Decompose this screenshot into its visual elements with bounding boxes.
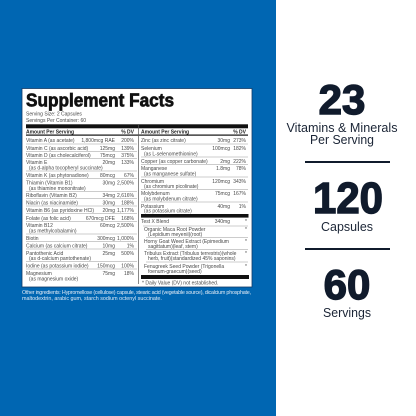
left column: vitamins: 75mcg [100, 153, 115, 159]
table headers: % DV [121, 130, 135, 136]
left column: vitamins: 20mg [102, 208, 115, 214]
left column: vitamins: 2,500% [117, 180, 135, 186]
other ingredients note: Other ingredients: Hypromellose (cellulose) capsule, stearic acid (vegetable source), dicalcium phosphate, [22, 290, 252, 296]
left column: vitamins: 25mg [102, 251, 115, 257]
left column: vitamins: 2,616% [117, 193, 135, 199]
right column: Test X blend: Tribulus Extract (Tribulus terrestris)(whole [144, 251, 237, 257]
right column: Test X blend: (Lepidium meyenii)(root) [148, 232, 203, 238]
right column: minerals: Selenium [141, 146, 162, 152]
left column: vitamins: (as d-alpha tocopheryl succinate) [29, 166, 103, 172]
left column: vitamins: 67% [124, 173, 135, 179]
stat: 60 servings: Servings [323, 306, 371, 320]
left column: vitamins: 30mg [102, 200, 115, 206]
panel: supplement facts label [22, 88, 252, 287]
left column: vitamins: 1,177% [117, 208, 135, 214]
right column: Test X blend: Fenugreek Seed Powder (Trigonella [144, 264, 224, 270]
left column: vitamins: Biotin [26, 236, 39, 242]
left column: vitamins: 20mg [102, 160, 115, 166]
left column: vitamins: 168% [121, 216, 135, 222]
heading: Supplement Facts: Supplement Facts [26, 90, 174, 110]
left column: vitamins: Thiamin (Vitamin B1) [26, 180, 73, 186]
right column: Test X blend: * [245, 227, 247, 233]
left column: vitamins: 60mcg [100, 223, 115, 229]
right column: minerals: 273% [233, 138, 247, 144]
left column: vitamins: Folate (as folic acid) [26, 216, 71, 222]
stat: 23 vitamins and minerals [286, 76, 398, 147]
stat: 23 vitamins and minerals: Vitamins & Minerals [286, 121, 398, 135]
right column: Test X blend: 340mg [215, 219, 230, 225]
left column: vitamins: Magnesium [26, 271, 52, 277]
left column: vitamins: 2,500% [117, 223, 135, 229]
left column: vitamins: 1,000% [117, 236, 135, 242]
right column: Test X blend: Organic Maca Root Powder [144, 227, 206, 233]
left column: vitamins: Vitamin B6 (as pyridoxine HCl) [26, 208, 94, 214]
right column: minerals: 100mcg [212, 146, 230, 152]
left column: vitamins: 188% [121, 200, 135, 206]
table headers: Amount Per Serving [141, 130, 189, 136]
left column: vitamins: (as magnesium oxide) [29, 276, 79, 282]
right column: Test X blend: * [245, 264, 247, 270]
left column: vitamins: 133% [121, 160, 135, 166]
right column: Test X blend: sagittatum)(leaf, stem) [148, 244, 198, 250]
serving information: Serving Size: 2 Capsules [26, 112, 82, 118]
right column: minerals: Molybdenum [141, 191, 170, 197]
left column: vitamins: 300mcg [97, 236, 115, 242]
left column: vitamins: 34mg [102, 193, 115, 199]
right column: Test X blend: * Daily Value (DV) not established. [142, 280, 218, 286]
serving information: Servings Per Container: 60 [26, 118, 86, 124]
right column: minerals: (as L-selenomethionine) [144, 152, 198, 158]
right column: minerals: (as manganese sulfate) [144, 172, 197, 178]
table headers [26, 130, 247, 136]
divider [305, 161, 390, 163]
other ingredients note: maltodextrin, arabic gum, starch sodium octenyl succinate. [22, 296, 162, 302]
table headers: Amount Per Serving [26, 130, 74, 136]
right column: minerals: 182% [233, 146, 247, 152]
stat: 120 capsules: 120 [313, 174, 383, 223]
table headers: % DV [233, 130, 247, 136]
right column: minerals [141, 138, 247, 214]
right column: minerals: 120mcg [212, 179, 230, 185]
left column: vitamins: Vitamin A (as acetate) [26, 138, 75, 144]
left column: vitamins: 375% [121, 153, 135, 159]
stat: 60 servings: 60 [324, 261, 370, 308]
right column: minerals: (as potassium citrate) [144, 208, 192, 214]
left column: vitamins [26, 138, 135, 282]
right column: minerals: Potassium [141, 204, 164, 210]
right column: Test X blend: * [245, 239, 247, 245]
left column: vitamins: Vitamin B12 [26, 223, 53, 229]
right column: minerals: Chromium [141, 179, 164, 185]
right column: minerals: 78% [236, 166, 247, 172]
stat: 23 vitamins and minerals: Per Serving [310, 133, 374, 147]
left column: vitamins: Calcium (as calcium citrate) [26, 244, 88, 250]
left column: vitamins: 500% [121, 251, 135, 257]
left column: vitamins: (as thiamine mononitrate) [29, 186, 86, 192]
right column: minerals: Manganese [141, 166, 167, 172]
left column: vitamins: Vitamin D (as cholecalciferol) [26, 153, 91, 159]
left column: vitamins: 1,800mcg RAE [81, 138, 116, 144]
right column: minerals: 1.8mg [216, 166, 230, 172]
right column: minerals: 167% [233, 191, 247, 197]
left column: vitamins: 670mcg DFE [86, 216, 116, 222]
right column: minerals: (as chromium picolinate) [144, 184, 199, 190]
stat: 23 vitamins and minerals: 23 [319, 76, 365, 123]
right column: Test X blend: Horny Goat Weed Extract (Epimedium [144, 239, 229, 245]
right column: Test X blend: herb, fruit)(standardized 45% saponins) [148, 256, 236, 262]
right column: Test X blend: * [245, 219, 247, 225]
left column: vitamins: 100% [121, 264, 135, 270]
right column: minerals: Copper (as copper carbonate) [141, 159, 208, 165]
left column: vitamins: 125mg [100, 146, 115, 152]
divider [305, 248, 390, 250]
right column: Test X blend [141, 219, 247, 286]
right column: Test X blend: Test X Blend [141, 219, 169, 225]
left column: vitamins: (as methylcobalamin) [29, 228, 77, 234]
left column: vitamins: 150mcg [97, 264, 115, 270]
right column: minerals: 1% [239, 204, 247, 210]
left column: vitamins: 10mg [102, 244, 115, 250]
left column: vitamins: (as d-calcium pantothenate) [29, 256, 91, 262]
left column: vitamins: 18% [124, 271, 135, 277]
right column: minerals: 75mcg [215, 191, 230, 197]
right column: minerals: 343% [233, 179, 247, 185]
left column: vitamins: 80mcg [100, 173, 115, 179]
left column: vitamins: Pantothenic Acid [26, 251, 63, 257]
left column: vitamins: Riboflavin (Vitamin B2) [26, 193, 77, 199]
right column: minerals: (as molybdenum citrate) [144, 196, 198, 202]
left column: vitamins: 200% [121, 138, 135, 144]
left column: vitamins: 139% [121, 146, 135, 152]
blue background panel [0, 0, 276, 416]
right column: Test X blend: foenum-graecum)(seed) [148, 269, 202, 275]
left column: vitamins: Vitamin C (as ascorbic acid) [26, 146, 88, 152]
left column: vitamins: Vitamin K (as phytonadione) [26, 173, 89, 179]
left column: vitamins: 1% [127, 244, 135, 250]
left column: vitamins: 75mg [102, 271, 115, 277]
serving information [26, 112, 86, 124]
right column: minerals: 2mg [220, 159, 230, 165]
right column: minerals: 40mg [217, 204, 230, 210]
right column: minerals: 222% [233, 159, 247, 165]
right column: minerals: 30mg [217, 138, 230, 144]
left column: vitamins: Niacin (as niacinamide) [26, 200, 78, 206]
right column: minerals: Zinc (as zinc citrate) [141, 138, 186, 144]
left column: vitamins: Vitamin E [26, 160, 48, 166]
right column: Test X blend: * [245, 251, 247, 257]
left column: vitamins: 30mg [102, 180, 115, 186]
left column: vitamins: Iodine (as potassium iodide) [26, 264, 89, 270]
stat: 120 capsules: Capsules [321, 220, 373, 234]
table rules [26, 124, 249, 284]
